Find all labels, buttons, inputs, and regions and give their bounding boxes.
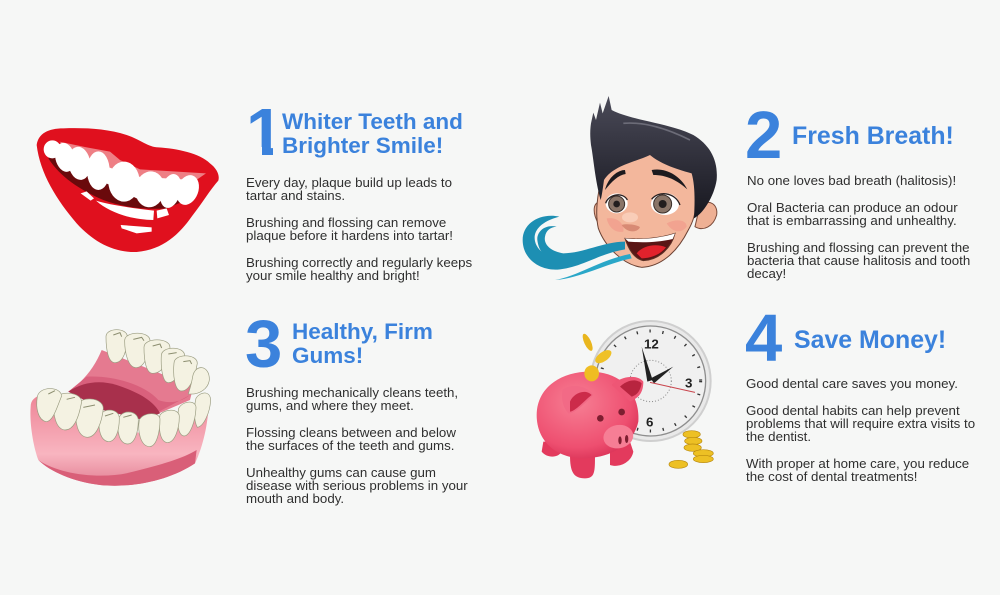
heading 1 (282, 109, 463, 158)
text block 1: Every day, plaque build up leads to (246, 175, 452, 190)
text block 4: the dentist. (746, 429, 811, 444)
text block 2: that is embarrassing and unhealthy. (747, 213, 957, 228)
text block 2: Oral Bacteria can produce an odour (747, 200, 958, 215)
text block 1: Brushing and flossing can remove (246, 215, 446, 230)
number 4: 4 (745, 301, 782, 376)
text block 4: the cost of dental treatments! (746, 469, 917, 484)
text block 2: Brushing and flossing can prevent the (747, 240, 970, 255)
panel 4: save money (745, 301, 975, 484)
icon: piggy bank, clock and coins: 12 (644, 336, 659, 351)
text block 2: No one loves bad breath (halitosis)! (747, 173, 956, 188)
text block 2 (747, 173, 970, 281)
text block 3: disease with serious problems in your (246, 478, 468, 493)
text block 3: the surfaces of the teeth and gums. (246, 438, 454, 453)
icon: boy face with fresh breath (523, 96, 717, 280)
number 2: 2 (745, 98, 782, 173)
text block 4: Good dental care saves you money. (746, 376, 958, 391)
text block 4: With proper at home care, you reduce (746, 456, 969, 471)
text block 4: Good dental habits can help prevent (746, 403, 960, 418)
heading 2: Fresh Breath! (792, 122, 954, 150)
panel 2: fresh breath (745, 98, 970, 281)
text block 3: Unhealthy gums can cause gum (246, 465, 436, 480)
heading 3: Healthy, Firm (292, 319, 433, 344)
text block 3: mouth and body. (246, 491, 344, 506)
icon: lower denture (30, 330, 211, 486)
icon: piggy bank, clock and coins: 6 (646, 415, 653, 430)
text block 3: Brushing mechanically cleans teeth, (246, 385, 458, 400)
panel 3: healthy gums (245, 307, 468, 506)
text block 1: tartar and stains. (246, 188, 345, 203)
text block 2: decay! (747, 266, 786, 281)
text block 1: your smile healthy and bright! (246, 268, 420, 283)
icon: smiling red lips (37, 128, 219, 252)
text block 4: problems that will require extra visits to (746, 416, 975, 431)
text block 3: Flossing cleans between and below (246, 425, 456, 440)
heading 4: Save Money! (794, 326, 946, 354)
text block 1: plaque before it hardens into tartar! (246, 228, 453, 243)
text block 3 (246, 385, 468, 506)
text block 4 (746, 376, 975, 484)
text block 1 (246, 175, 472, 283)
heading 1: Whiter Teeth and (282, 109, 463, 134)
text block 3: gums, and where they meet. (246, 398, 414, 413)
panel 1: whiter teeth (246, 109, 472, 283)
number 3: 3 (245, 307, 282, 382)
text block 2: bacteria that cause halitosis and tooth (747, 253, 970, 268)
heading 1: Brighter Smile! (282, 133, 443, 158)
number 1: 1 (246, 95, 283, 170)
heading 3: Gums! (292, 343, 363, 368)
icon: piggy bank, clock and coins (537, 321, 713, 478)
heading 3 (292, 319, 433, 368)
text block 1: Brushing correctly and regularly keeps (246, 255, 472, 270)
icon: piggy bank, clock and coins: 3 (685, 375, 692, 390)
